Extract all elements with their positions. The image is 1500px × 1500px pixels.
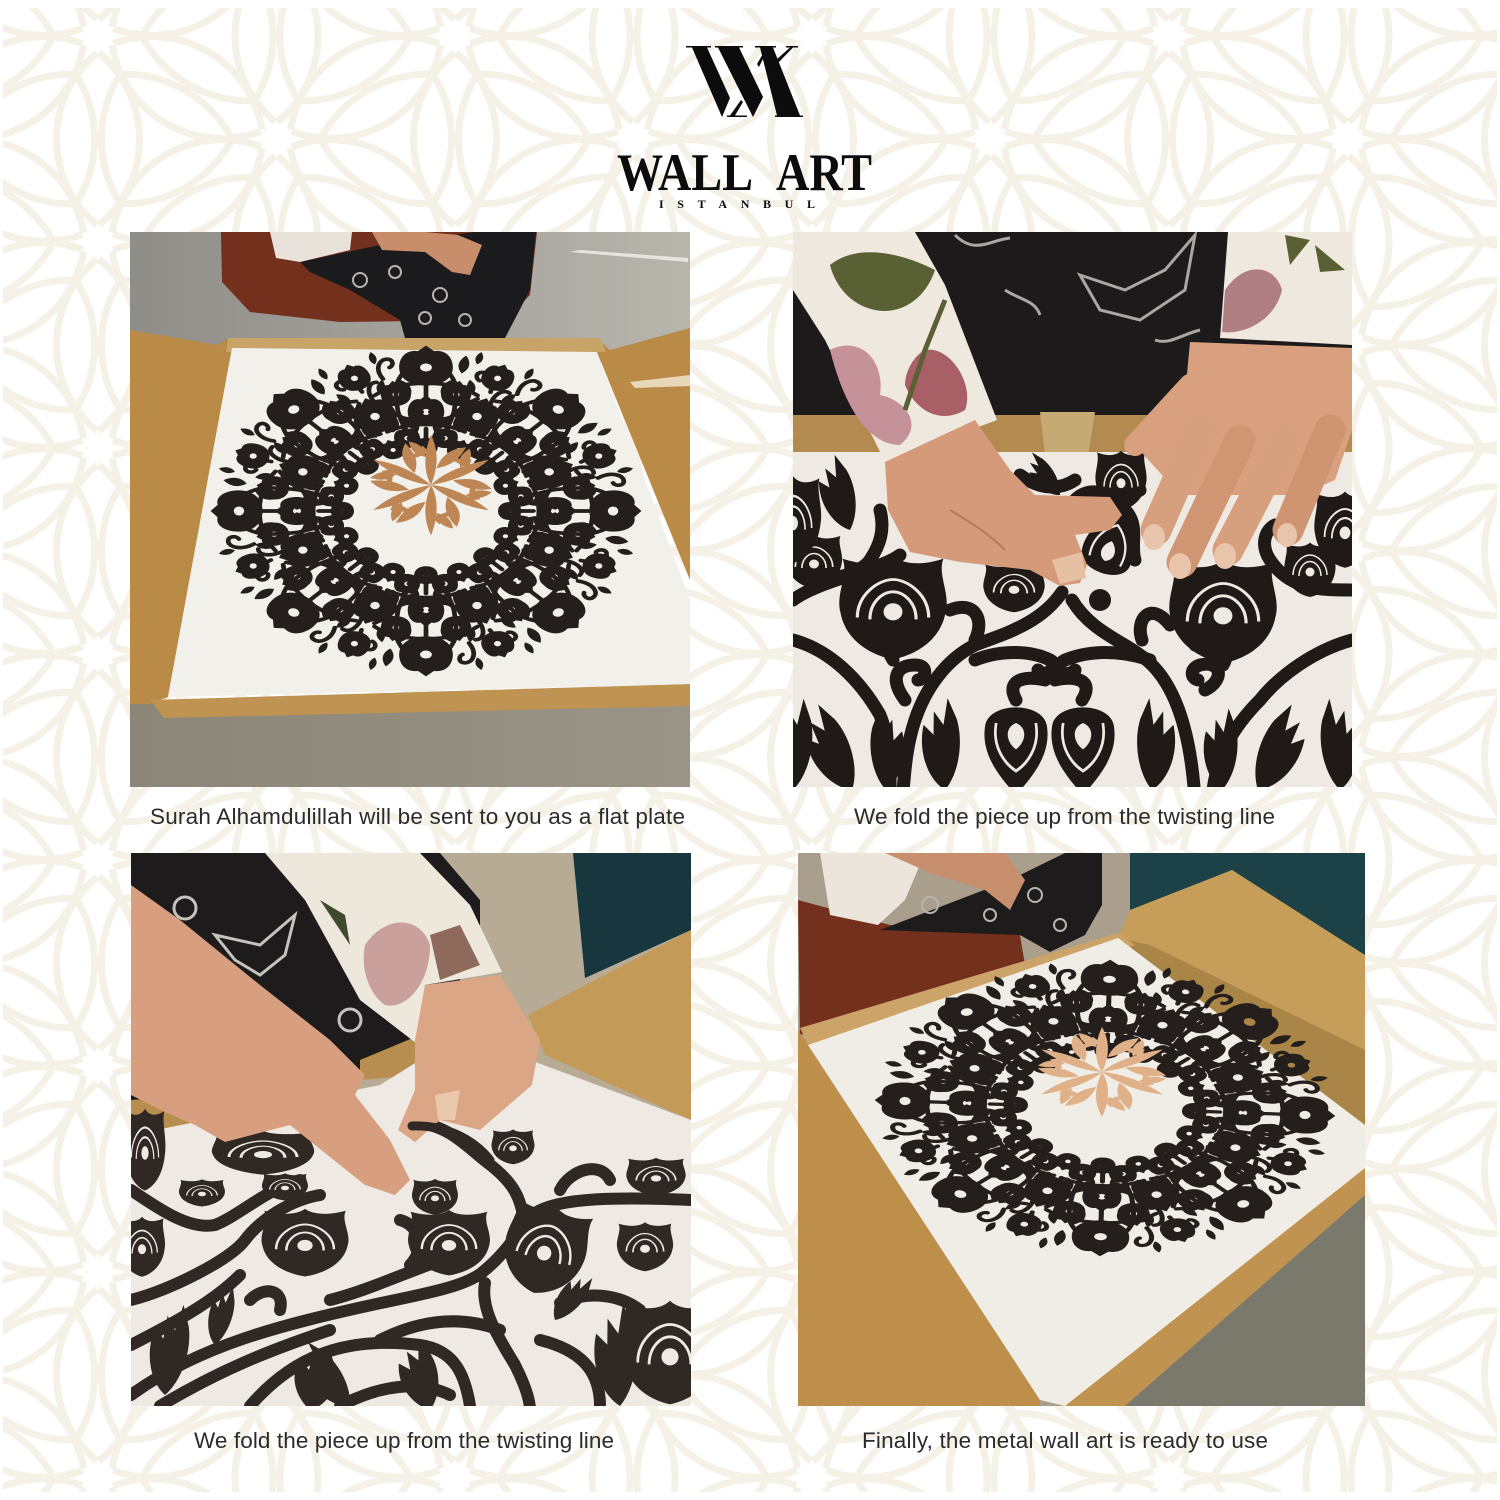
copper centre star xyxy=(370,434,492,536)
left sleeve floral xyxy=(793,232,997,462)
cardboard strip xyxy=(793,415,1352,452)
tape xyxy=(1040,412,1095,455)
pale centre star xyxy=(1020,1026,1184,1118)
concrete floor xyxy=(1125,1195,1365,1406)
filigree close-up xyxy=(131,1108,691,1406)
cardboard box xyxy=(130,328,690,718)
foam xyxy=(793,452,1352,787)
foam xyxy=(131,1060,691,1406)
dark trousers xyxy=(131,853,480,1110)
caption: step 2: We fold the piece up from the twisting line xyxy=(854,804,1275,829)
logo wordmark: ART xyxy=(776,144,872,202)
left hand pointing xyxy=(131,885,410,1195)
foam sheet xyxy=(168,348,690,697)
held piece xyxy=(412,1126,490,1160)
torso print xyxy=(955,235,1200,341)
teal chair xyxy=(573,853,691,978)
caption: step 4: Finally, the metal wall art is ready to use xyxy=(862,1428,1268,1453)
filigree close-up xyxy=(793,450,1352,787)
room background xyxy=(358,853,691,1120)
right hand holding xyxy=(398,975,540,1142)
box flap xyxy=(528,930,691,1120)
floor and seat background xyxy=(798,853,1365,1406)
logo: Wall Art Istanbul xyxy=(617,46,872,211)
foam sheet xyxy=(808,938,1365,1406)
logo wordmark xyxy=(617,144,872,202)
panel: folding close-up photo 1 xyxy=(793,232,1352,787)
panel: finished artwork photo xyxy=(798,853,1365,1406)
teal chair xyxy=(1130,853,1365,960)
trouser print xyxy=(174,897,361,1031)
red chair xyxy=(798,900,1025,1035)
panel: flat plate photo xyxy=(130,232,690,787)
right sleeve floral xyxy=(1220,232,1352,345)
cardboard box xyxy=(798,870,1365,1406)
logo subtitle: ISTANBUL xyxy=(659,197,815,211)
logo wordmark: WALL xyxy=(617,144,753,202)
mandala artwork xyxy=(210,346,642,676)
white floral sleeve xyxy=(265,853,502,1050)
caption: step 1: Surah Alhamdulillah will be sent to you as a flat plate xyxy=(150,804,685,829)
floor light streak xyxy=(570,250,688,262)
mandala artwork xyxy=(853,941,1357,1275)
person seated xyxy=(820,853,1102,952)
chair xyxy=(221,232,537,322)
dark torso xyxy=(793,232,1352,432)
caption: step 3: We fold the piece up from the twisting line xyxy=(194,1428,614,1453)
hand right xyxy=(1135,342,1352,579)
floor xyxy=(130,232,690,362)
icon: WM monogram xyxy=(686,46,803,117)
person seated xyxy=(270,232,536,338)
panel: folding close-up photo 2 xyxy=(119,853,719,1418)
hand left xyxy=(885,420,1122,586)
